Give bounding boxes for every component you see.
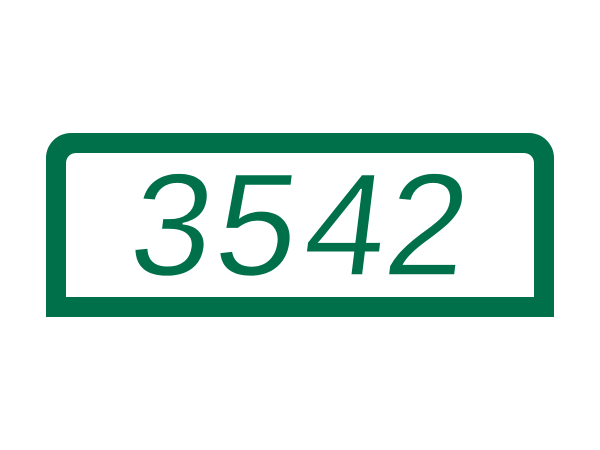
display frame xyxy=(46,133,554,317)
display number: 3542 xyxy=(122,143,478,307)
